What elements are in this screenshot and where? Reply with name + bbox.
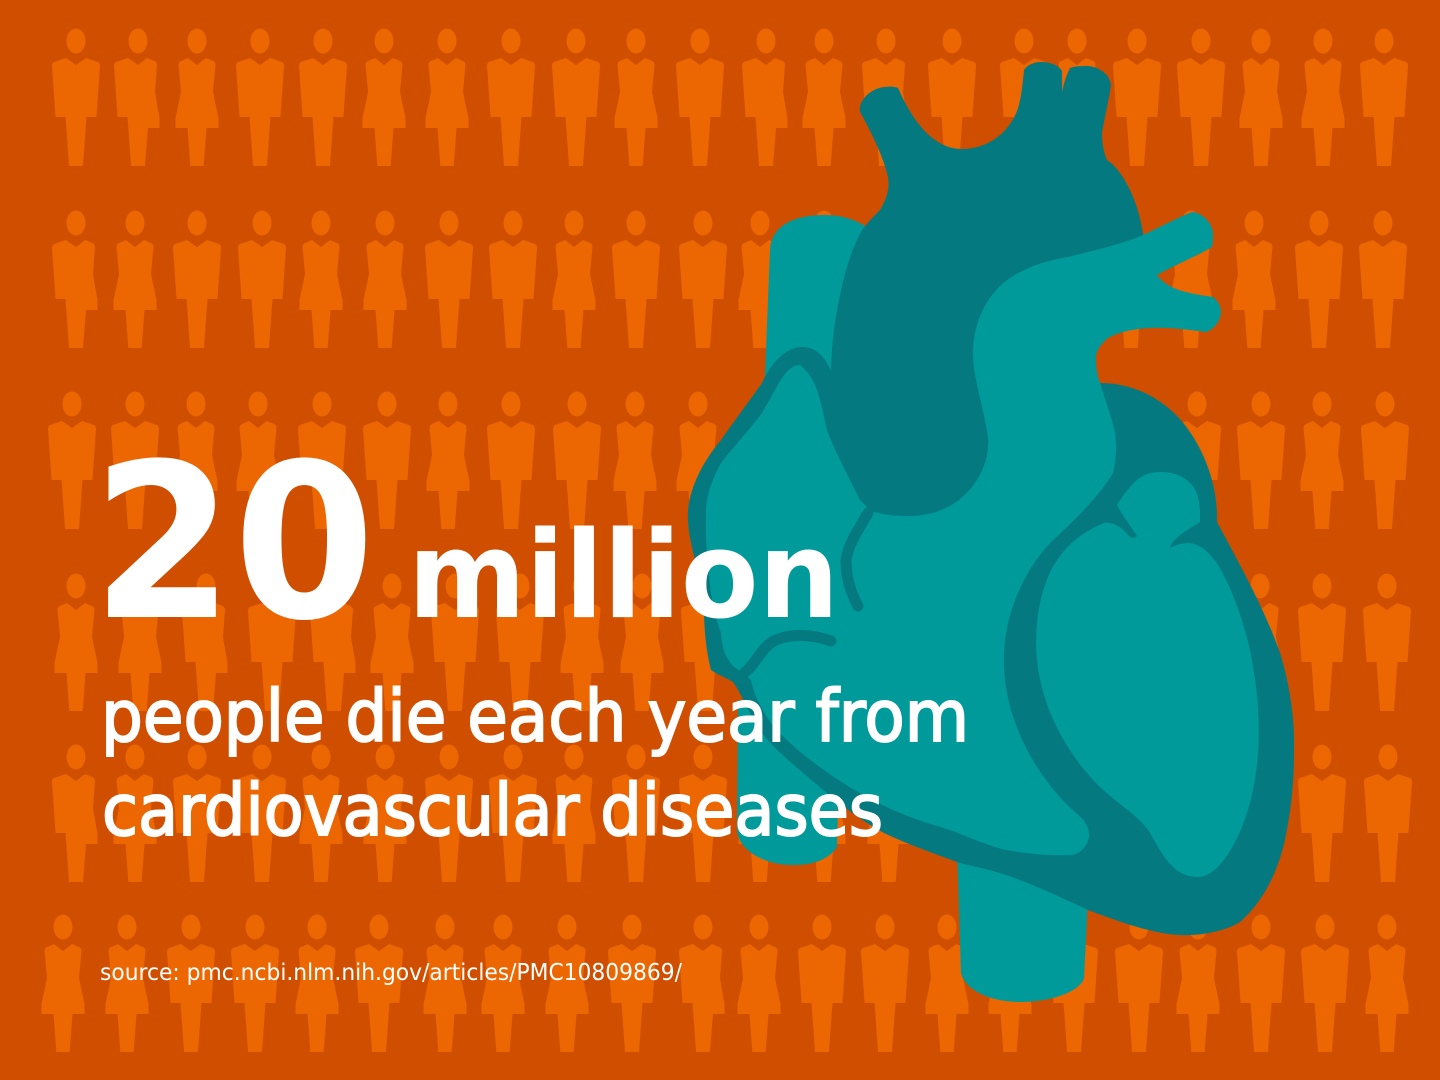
subheading line 2: cardiovascular diseases bbox=[102, 769, 883, 852]
headline: 20 million bbox=[92, 417, 839, 668]
heart: right atrium and ventricle bbox=[706, 365, 1115, 855]
row of people 3 bbox=[48, 392, 1409, 529]
heart: aorta bbox=[830, 62, 1145, 516]
heart: left ventricle bbox=[1036, 472, 1259, 877]
row of people 4 bbox=[54, 574, 1411, 711]
heart: outer wall bbox=[688, 347, 1294, 935]
subheading line 1: people die each year from bbox=[101, 675, 969, 758]
subheading text bbox=[101, 675, 969, 852]
icon: anatomical heart bbox=[688, 62, 1294, 1002]
heart: lower coronary line bbox=[745, 635, 831, 672]
heart: lower left vein bbox=[737, 700, 840, 865]
row of people 2 bbox=[52, 210, 1407, 348]
heart: pulmonary artery bbox=[973, 212, 1221, 540]
big number 20: 20 bbox=[92, 417, 375, 668]
row of people 6 bbox=[42, 914, 1408, 1052]
row of people 1 bbox=[52, 28, 1408, 166]
row of people 5 bbox=[52, 744, 1412, 882]
heart: bottom vessel bbox=[957, 850, 1088, 1002]
word million: million bbox=[408, 507, 839, 646]
source line: source: pmc.ncbi.nlm.nih.gov/articles/PMC10809869/ bbox=[100, 960, 682, 986]
heart: upper coronary line bbox=[846, 513, 868, 606]
heart: upper left vein bbox=[764, 215, 880, 400]
